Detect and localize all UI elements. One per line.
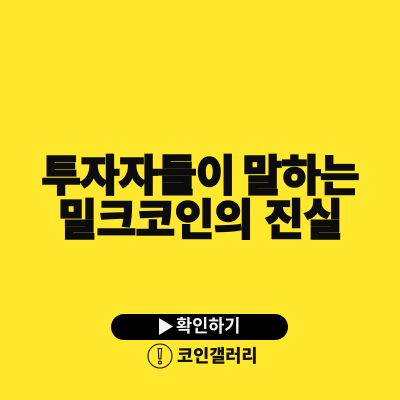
button label: 확인하기 <box>176 316 240 336</box>
title: 투자자들이 말하는 <box>41 153 359 201</box>
brand name: 코인갤러리 <box>177 346 258 366</box>
button: confirm <box>111 314 288 340</box>
icon: exclamation circle <box>147 344 173 368</box>
icon: play triangle <box>159 318 173 335</box>
title <box>41 153 359 245</box>
title: 밀크코인의 진실 <box>58 197 342 245</box>
